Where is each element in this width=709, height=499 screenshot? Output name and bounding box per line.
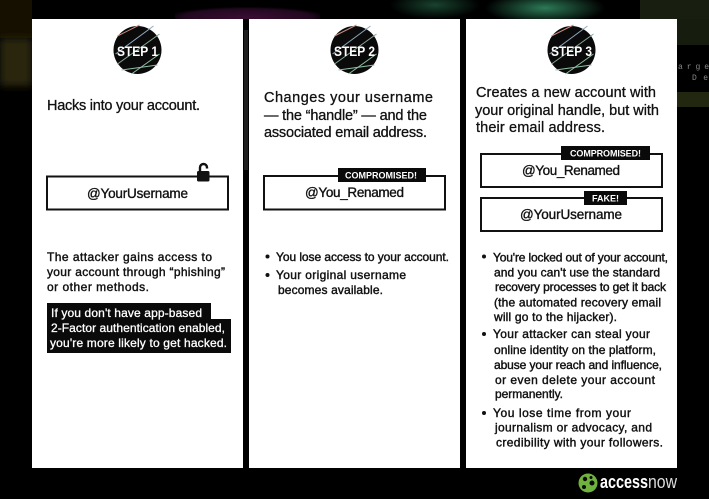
username box: fake: @YourUsername: [520, 207, 622, 222]
username box: fake: FAKE!: [592, 194, 619, 204]
panel: step 2: [249, 19, 460, 468]
heading: step 2: [264, 90, 433, 141]
callout: 2-factor warning: If you don't have app-based: [51, 306, 202, 320]
callout: 2-factor warning: you're more likely to get hacked.: [50, 336, 227, 350]
list: step 3 consequences: recovery processes to get it back: [495, 280, 667, 294]
username box: step 2: COMPROMISED!: [345, 170, 417, 180]
list: step 2 consequences: You lose access to your account.: [276, 250, 449, 264]
text: attacker description: [47, 250, 225, 294]
icon: step 1 badge: [114, 25, 162, 74]
list: step 3 consequences: abuse your reach and influence,: [494, 358, 662, 372]
list: step 3 consequences: permanently.: [495, 387, 563, 401]
text: attacker description: your account through “phishing”: [47, 265, 225, 279]
icon: step 2 badge: [330, 25, 378, 74]
username box: compromised: COMPROMISED!: [570, 148, 641, 158]
panel: step 3: [466, 19, 677, 468]
list: step 3 consequences: journalism or advocacy, and: [494, 420, 652, 434]
background photo strip: De: [692, 74, 708, 83]
username box: compromised: [481, 146, 662, 187]
callout: 2-factor warning: 2-Factor authentication enabled,: [51, 321, 225, 335]
icon: step 3 badge: [548, 25, 596, 74]
username box: step 2: @You_Renamed: [305, 185, 404, 200]
list: step 2 consequences: Your original username: [276, 268, 406, 282]
list: step 3 consequences: and you can't use the standard: [494, 266, 660, 280]
heading: step 3: Creates a new account with: [476, 85, 656, 101]
icon: accessnow globe: [578, 474, 598, 492]
list: step 3 consequences: online identity on the platform,: [494, 343, 656, 357]
username box: fake: [481, 191, 662, 231]
background photo strip: arge: [678, 63, 709, 72]
list: step 3 consequences: or even delete your account: [495, 373, 656, 387]
text: attacker description: The attacker gains access to: [47, 250, 212, 264]
heading: step 2: — the “handle” — and the: [264, 108, 427, 124]
logo: accessnow: [578, 472, 678, 492]
list: step 3 consequences: Your attacker can steal your: [493, 327, 650, 341]
callout: 2-factor warning: [47, 303, 231, 353]
heading: step 2: associated email address.: [264, 125, 427, 141]
list: step 3 consequences: (the automated recovery email: [494, 296, 661, 310]
icon: step 2 badge: STEP 2: [334, 43, 375, 59]
icon: step 1 badge: STEP 1: [117, 43, 158, 59]
icon: step 3 badge: STEP 3: [551, 43, 592, 59]
logo: accessnow: access: [600, 472, 648, 492]
username box: step 2: [264, 168, 445, 210]
heading: step 3: [475, 85, 659, 136]
username box: step 1: @YourUsername: [87, 186, 188, 201]
username box: compromised: @You_Renamed: [522, 163, 620, 178]
username box: step 1: [47, 176, 228, 210]
list: step 2 consequences: [266, 250, 449, 297]
heading: step 1: Hacks into your account.: [47, 98, 200, 114]
panel: step 1: [32, 19, 243, 468]
list: step 3 consequences: will go to the hijacker).: [493, 310, 617, 324]
list: step 3 consequences: [482, 250, 668, 450]
icon: open padlock: [197, 164, 210, 182]
list: step 2 consequences: becomes available.: [278, 283, 383, 297]
logo: accessnow: now: [648, 472, 678, 492]
heading: step 2: Changes your username: [264, 90, 433, 106]
heading: step 3: your original handle, but with: [475, 103, 659, 119]
text: attacker description: or other methods.: [47, 280, 149, 294]
list: step 3 consequences: You lose time from your: [493, 406, 631, 420]
list: step 3 consequences: credibility with your followers.: [496, 436, 663, 450]
heading: step 3: their email address.: [476, 120, 605, 136]
list: step 3 consequences: You're locked out of your account,: [493, 250, 668, 264]
